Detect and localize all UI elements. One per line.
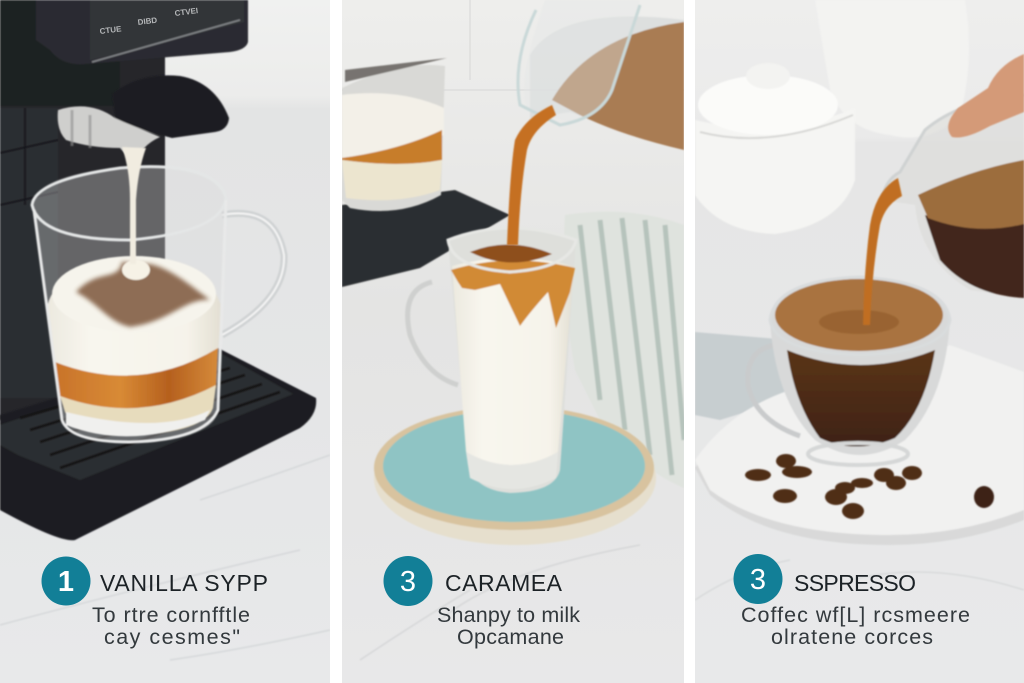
coffee machine body bbox=[0, 0, 248, 420]
background white vase bbox=[841, 104, 962, 136]
glass mug with layered latte bbox=[32, 167, 284, 442]
marble background bbox=[0, 0, 330, 683]
teal plate bbox=[374, 406, 656, 545]
background glass with layers bbox=[342, 58, 447, 211]
description: step 3: olratene corces bbox=[771, 625, 933, 649]
panel: espresso step bbox=[695, 0, 1024, 683]
pitcher bbox=[518, 0, 684, 150]
napkin bbox=[695, 332, 790, 420]
heading: caramel: CARAMEA bbox=[445, 570, 563, 596]
badge: step 2 bbox=[384, 556, 432, 606]
caramel pour stream bbox=[507, 105, 556, 245]
marble background bbox=[342, 0, 684, 683]
description: step 1: cay cesmes" bbox=[104, 625, 240, 649]
badge: step 1 bbox=[42, 556, 90, 606]
panel: caramel step bbox=[342, 0, 684, 683]
heading: vanilla syrup: VANILLA SYPP bbox=[100, 570, 268, 596]
white sugar bowl bbox=[695, 63, 855, 234]
spout bbox=[58, 75, 229, 165]
badge: step 3: 3 bbox=[750, 564, 766, 596]
description: step 2: Shanpy to milk bbox=[437, 603, 580, 627]
description: step 2: Opcamane bbox=[457, 625, 564, 649]
background dark mat bbox=[342, 190, 510, 287]
coffee beans bbox=[745, 454, 994, 519]
glass pitcher with coffee bbox=[882, 95, 1024, 298]
panel: vanilla syrup step bbox=[0, 0, 330, 683]
description: step 3 bbox=[742, 606, 969, 644]
badge: step 2: 3 bbox=[400, 566, 416, 598]
drip tray bbox=[0, 348, 316, 540]
control labels: CTUE bbox=[99, 24, 123, 36]
milk stream bbox=[122, 147, 146, 264]
description: step 2 bbox=[437, 603, 580, 649]
control labels: DIBD bbox=[137, 16, 158, 27]
striped towel bbox=[576, 213, 684, 477]
coffee pour stream bbox=[863, 178, 902, 325]
tall latte glass bbox=[408, 228, 576, 493]
description: step 1 bbox=[92, 603, 250, 649]
marble plate bbox=[695, 345, 1024, 545]
heading: espresso: SSPRESSO bbox=[794, 570, 916, 596]
badge: step 1: 1 bbox=[58, 566, 74, 598]
badge: step 3 bbox=[734, 554, 782, 604]
marble background bbox=[695, 0, 1024, 683]
description: step 3: Coffec wf[L] rcsmeere bbox=[741, 603, 970, 627]
control labels bbox=[100, 8, 198, 34]
description: step 1: To rtre cornfftle bbox=[92, 603, 250, 627]
coffee cup bbox=[748, 277, 950, 465]
hand bbox=[948, 54, 1024, 138]
control labels: CTVEI bbox=[174, 6, 199, 18]
